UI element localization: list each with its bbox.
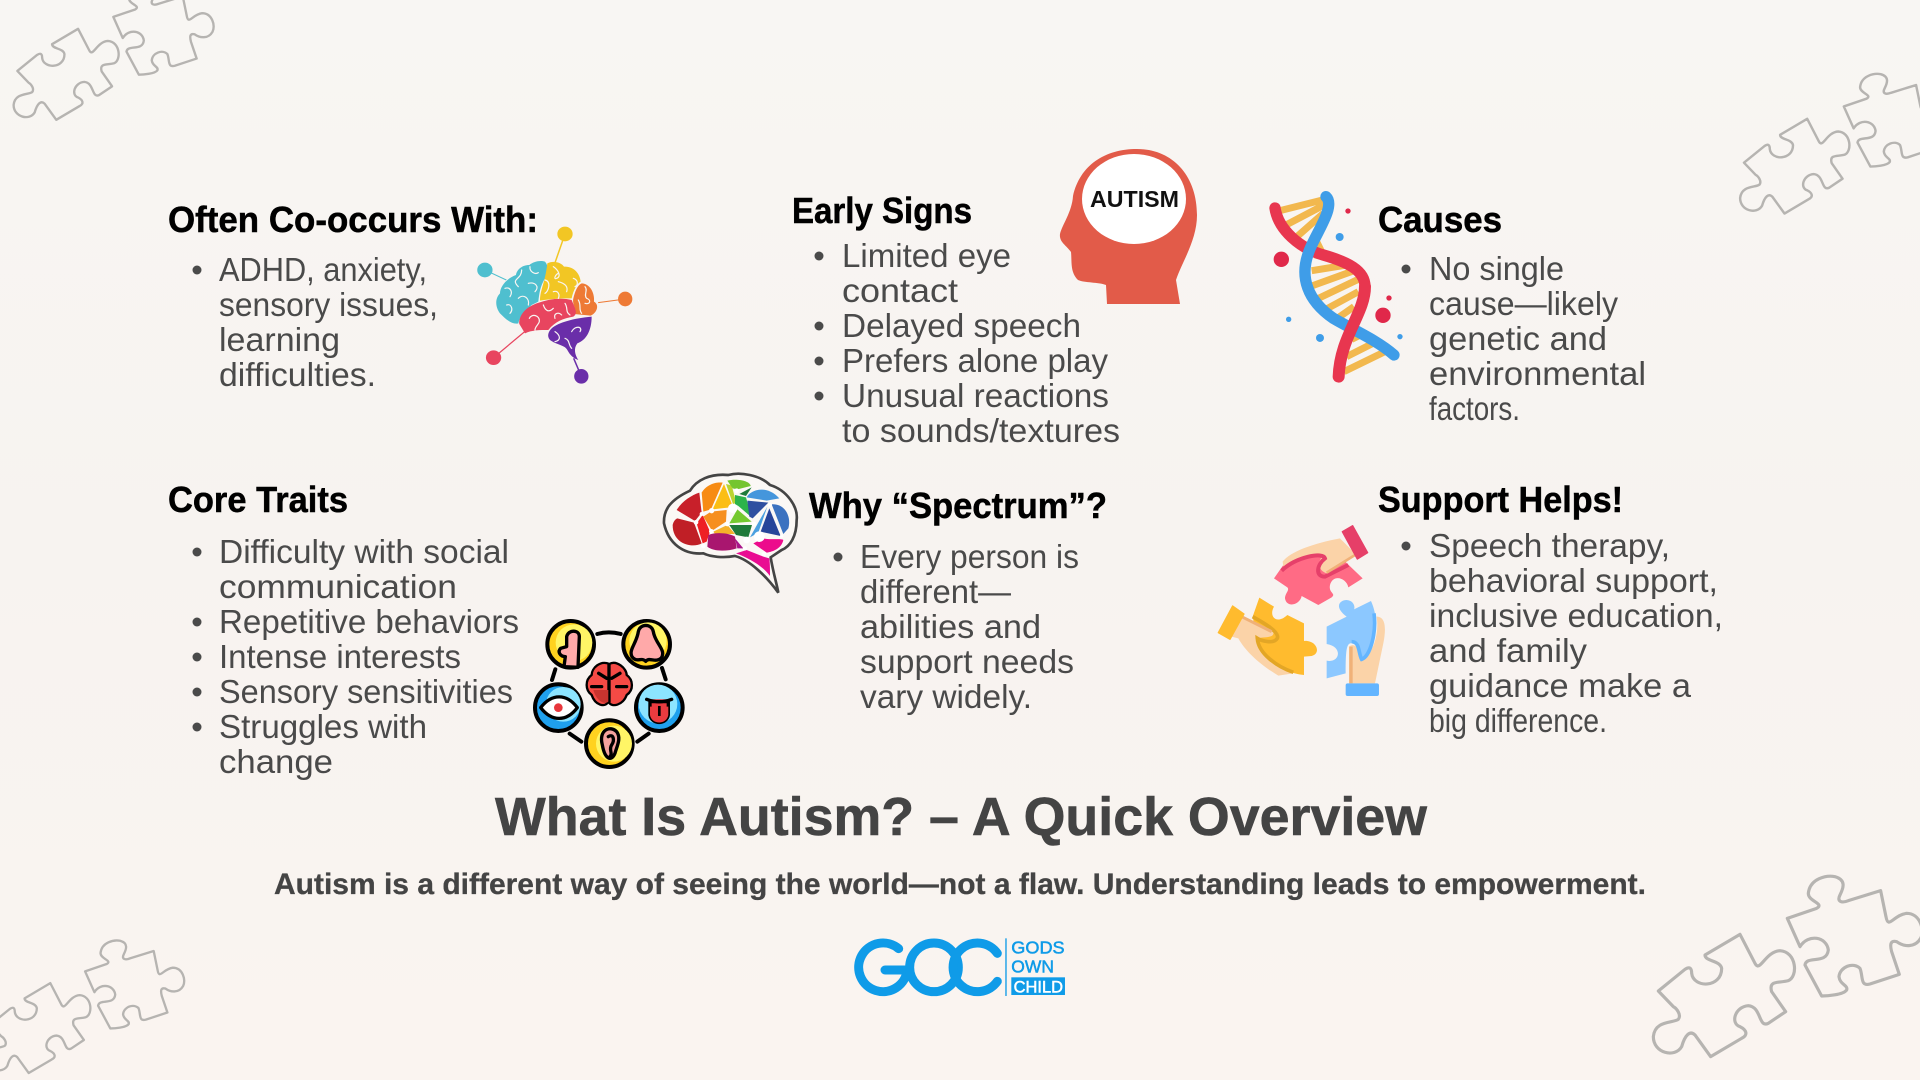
text block: core traits list: Sensory sensitivities <box>219 673 513 710</box>
panel: core traits <box>168 479 683 780</box>
decoration: puzzle outline top right <box>1740 74 1920 214</box>
text block: early signs list: Prefers alone play <box>842 342 1108 379</box>
logo: gods own child: CHILD <box>1014 977 1063 996</box>
text block: core traits list: Intense interests <box>219 638 461 675</box>
text block: early signs list <box>814 237 1120 449</box>
panel: causes <box>1274 197 1646 427</box>
text block: core traits list: change <box>219 743 333 780</box>
panel: support helps <box>1218 479 1723 739</box>
text block: causes description: factors. <box>1429 390 1520 427</box>
text block: support description: guidance make a <box>1429 667 1692 704</box>
text block: early signs list: to sounds/textures <box>842 412 1120 449</box>
logo: gods own child: OWN <box>1011 956 1054 976</box>
text block: causes description: cause—likely <box>1429 285 1618 322</box>
text block: support description <box>1402 527 1723 739</box>
heading: core traits: Core Traits <box>168 479 348 520</box>
text block: support description: big difference. <box>1429 702 1607 739</box>
logo: gods own child: GODS <box>1011 937 1065 957</box>
text block: co-occurring conditions <box>192 251 438 393</box>
text block: core traits list: Difficulty with social <box>219 533 509 570</box>
heading: support helps: Support Helps! <box>1378 479 1623 520</box>
text block: core traits list: Struggles with <box>219 708 427 745</box>
panel: why spectrum <box>664 474 1107 715</box>
text block: causes description <box>1402 250 1646 427</box>
heading: why spectrum: Why “Spectrum”? <box>809 485 1107 526</box>
text block: early signs list: Delayed speech <box>842 307 1081 344</box>
decoration: puzzle outline bottom right <box>1653 876 1920 1057</box>
heading: often co-occurs with: Often Co-occurs With: <box>168 199 538 240</box>
text block: spectrum explanation <box>834 538 1079 715</box>
text block: core traits list: communication <box>219 568 457 605</box>
heading: early signs: Early Signs <box>792 190 972 231</box>
subtitle: Autism is a different way of seeing the world—not a flaw. Understanding leads to empowerment. <box>274 868 1646 901</box>
text block: support description: behavioral support, <box>1429 562 1718 599</box>
text block: core traits list: Repetitive behaviors <box>219 603 519 640</box>
text block: support description: and family <box>1429 632 1588 669</box>
text block: support description: Speech therapy, <box>1429 527 1670 564</box>
icon: head silhouette with autism label <box>1060 149 1197 304</box>
icon: head silhouette with autism label: AUTISM <box>1090 186 1179 212</box>
text block: support description: inclusive education, <box>1429 597 1723 634</box>
text block: causes description: environmental <box>1429 355 1646 392</box>
text block: spectrum explanation: abilities and <box>860 608 1041 645</box>
text block: co-occurring conditions: learning <box>219 321 340 358</box>
icon: colourful brain with nodes <box>477 227 632 384</box>
text block: core traits list <box>192 533 519 780</box>
panel: early signs <box>792 149 1197 449</box>
text block: spectrum explanation: Every person is <box>860 538 1079 575</box>
panel: often co-occurs with <box>168 199 632 393</box>
text block: early signs list: contact <box>842 272 958 309</box>
text block: co-occurring conditions: sensory issues, <box>219 286 438 323</box>
icon: hands joining puzzle pieces <box>1218 526 1385 696</box>
text block: causes description: No single <box>1429 250 1564 287</box>
decoration: puzzle outline top left <box>14 0 214 120</box>
text block: early signs list: Limited eye <box>842 237 1011 274</box>
decoration: puzzle outline bottom left <box>0 940 184 1073</box>
logo: gods own child <box>859 937 1065 996</box>
icon: rainbow brain speech bubble <box>664 474 797 593</box>
text block: spectrum explanation: different— <box>860 573 1011 610</box>
text block: early signs list: Unusual reactions <box>842 377 1109 414</box>
text block: causes description: genetic and <box>1429 320 1607 357</box>
icon: dna helix <box>1274 197 1403 377</box>
text block: spectrum explanation: vary widely. <box>860 678 1032 715</box>
text block: co-occurring conditions: difficulties. <box>219 356 376 393</box>
heading: causes: Causes <box>1378 199 1502 240</box>
text block: spectrum explanation: support needs <box>860 643 1074 680</box>
text block: co-occurring conditions: ADHD, anxiety, <box>219 251 427 288</box>
icon: five senses around brain <box>535 621 683 767</box>
title: What Is Autism? – A Quick Overview <box>495 787 1428 847</box>
